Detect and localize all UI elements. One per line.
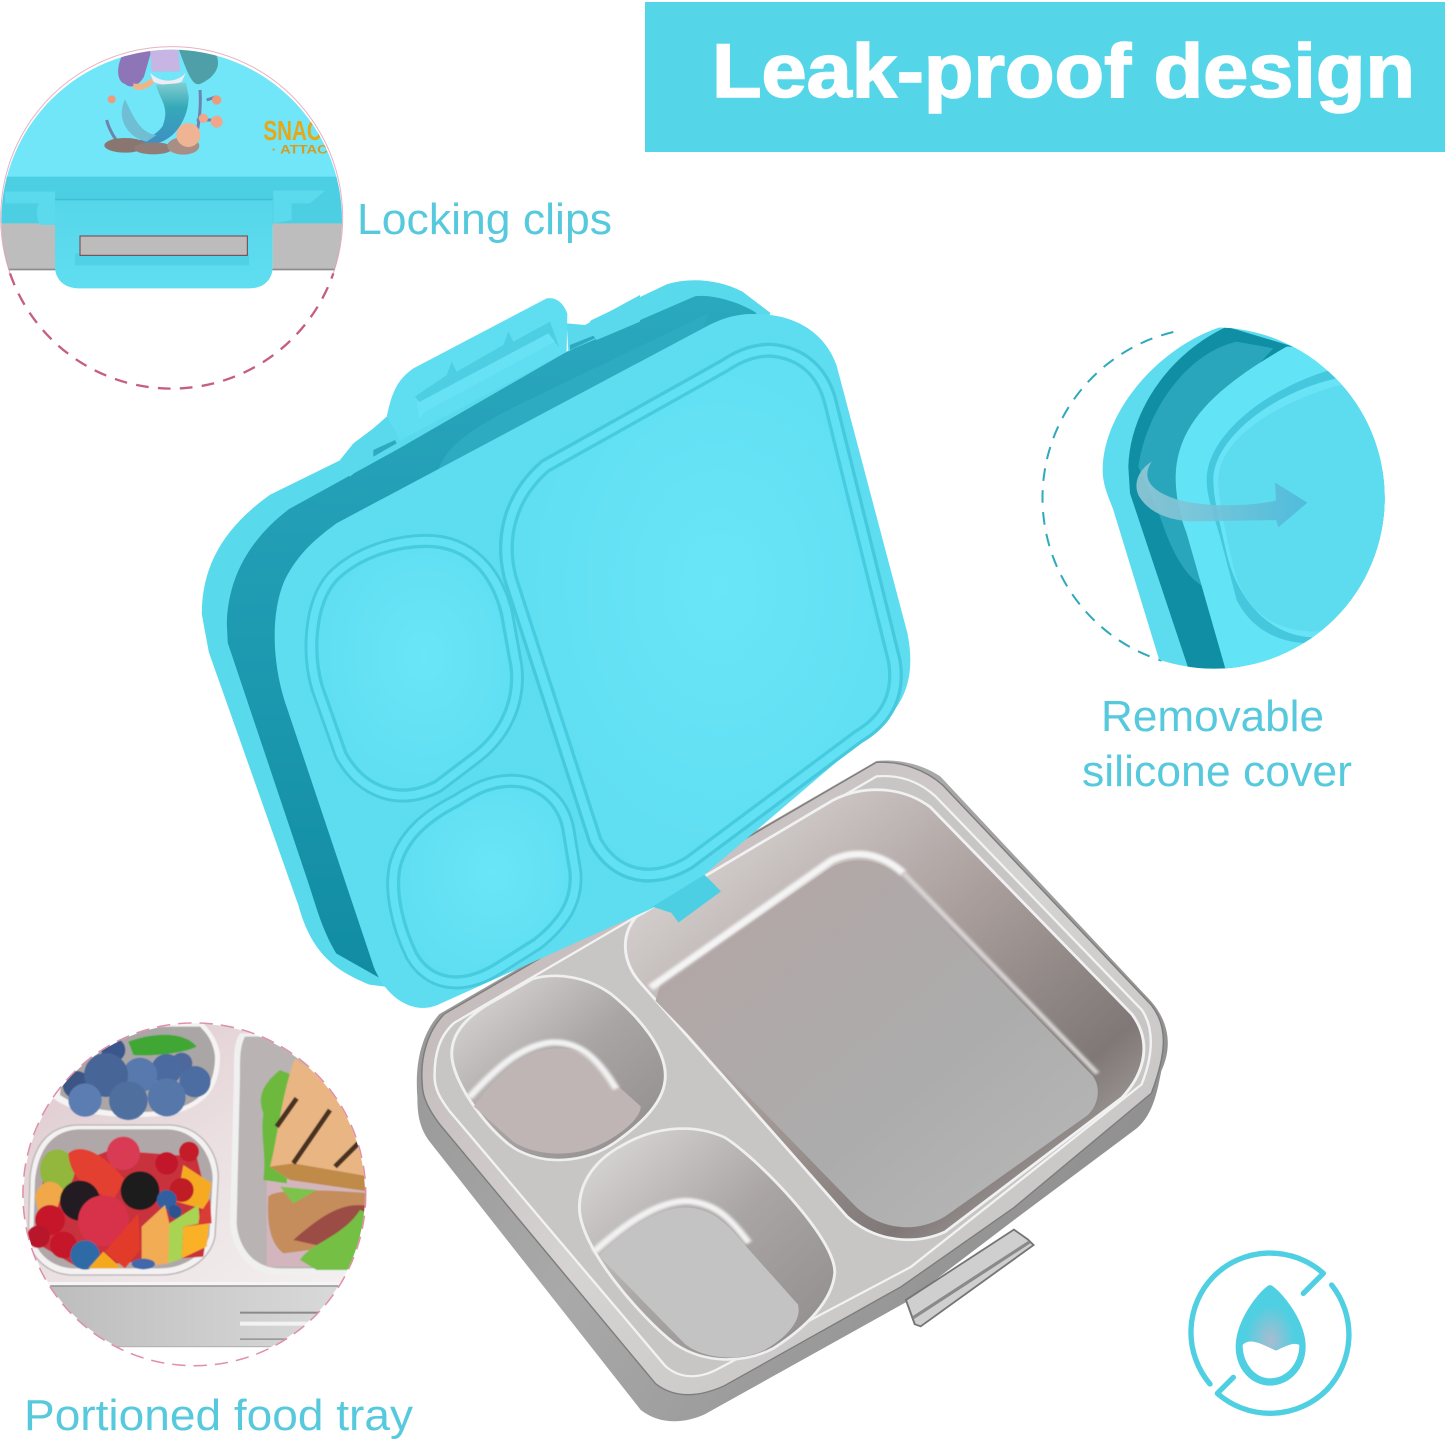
small compartment top — [452, 976, 665, 1160]
hinge — [340, 295, 640, 477]
large seal — [512, 356, 890, 869]
cover tab — [653, 875, 721, 922]
label: portioned food tray: Portioned food tray — [24, 1391, 413, 1440]
title banner — [645, 2, 1445, 152]
label: removable silicone cover — [1082, 692, 1352, 796]
lid back shell — [202, 280, 771, 987]
tray body — [417, 760, 1168, 1421]
label: removable silicone cover: silicone cover — [1082, 747, 1352, 796]
silicone cover — [275, 314, 910, 1008]
label: removable silicone cover: Removable — [1101, 692, 1324, 741]
brand mark: · ATTACK — [272, 142, 339, 156]
latch — [906, 1230, 1034, 1326]
inset: locking clips — [0, 40, 347, 389]
locking clip — [55, 199, 273, 288]
tray rim — [422, 762, 1163, 1395]
brand mark: SNACK — [263, 115, 337, 146]
icon: mermaid decal — [104, 48, 223, 155]
small compartment bottom — [579, 1129, 835, 1359]
arrow — [1136, 462, 1307, 527]
lid inner recess — [227, 296, 756, 977]
lower seal — [399, 786, 570, 977]
inset: portioned food tray — [22, 1022, 366, 1366]
brand mark — [264, 120, 328, 154]
steel side panel — [48, 1282, 341, 1365]
left seal — [317, 546, 512, 790]
right pocket: sandwich — [230, 1033, 365, 1271]
label: locking clips: Locking clips — [357, 195, 612, 244]
icon: no-leak water drop — [1191, 1253, 1349, 1413]
middle pocket: fruit — [27, 1125, 218, 1275]
inset: removable silicone cover — [1042, 320, 1397, 677]
title: Leak-proof design — [712, 29, 1415, 114]
top pocket: blueberries — [53, 1023, 220, 1120]
stainless steel tray — [417, 760, 1168, 1421]
large compartment — [625, 790, 1144, 1240]
